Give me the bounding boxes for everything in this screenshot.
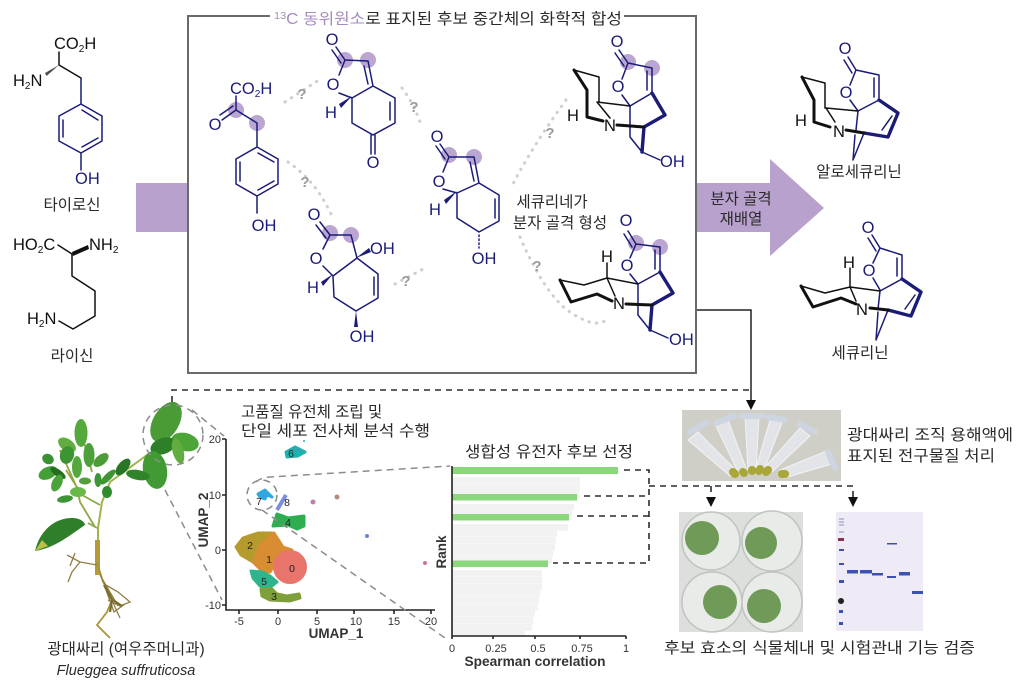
chart: Spearman correlation rank bars: Spearman correlation xyxy=(464,654,606,669)
heading: genome assembly and scRNA-seq: 고품질 유전체 조립 및 xyxy=(241,403,382,421)
structure: hydroxy butenolide: O xyxy=(433,173,446,191)
structure: securinane type intermediate: O xyxy=(620,212,633,230)
cluster numbers: 3 xyxy=(271,591,277,603)
label: plant name xyxy=(47,640,205,679)
structure: neosecurinane type intermediate: N xyxy=(604,117,616,135)
reaction paths: dotted uncertain steps: ? xyxy=(532,258,542,275)
chart: Spearman correlation rank bars: 0.5 xyxy=(530,643,546,655)
chart: UMAP scatter: 10 xyxy=(350,616,362,628)
connector: purple input bar xyxy=(136,183,188,232)
photo: leaf discs in culture wells xyxy=(679,511,803,632)
structure: keto acid intermediate: H xyxy=(260,80,272,98)
cluster numbers: 1 xyxy=(266,554,272,566)
cluster 7 xyxy=(258,490,272,499)
outlier clusters xyxy=(303,440,427,565)
cluster 0 xyxy=(273,550,307,584)
structure: lysine: H xyxy=(27,310,39,328)
image: plant Flueggea suffruticosa xyxy=(35,396,201,638)
cluster numbers: 5 xyxy=(261,576,267,588)
structure: allosecurinine: O xyxy=(840,84,853,102)
chart: Spearman correlation rank bars: 0.25 xyxy=(485,643,507,655)
structure: dihydroxy lactone xyxy=(307,206,395,346)
chart: UMAP scatter: 10 xyxy=(209,490,221,502)
cluster numbers xyxy=(247,448,295,603)
structure: tyrosine: CO xyxy=(54,35,79,53)
label: securinine: 세큐리닌 xyxy=(831,344,889,362)
structure: securinane type intermediate: O xyxy=(621,257,634,275)
structure: securinane type intermediate xyxy=(560,212,694,349)
reaction paths: dotted uncertain steps: ? xyxy=(297,86,307,103)
structure: neosecurinane type intermediate: O xyxy=(611,33,624,51)
structure: lysine: 2 xyxy=(113,245,119,256)
structure: butenolide dienone: O xyxy=(326,31,339,49)
label: tyrosine: 타이로신 xyxy=(43,196,101,214)
structure: butenolide dienone xyxy=(325,31,395,172)
chart: UMAP scatter: -5 xyxy=(234,616,244,628)
cluster 5 xyxy=(251,571,277,586)
cluster 6 xyxy=(286,447,305,457)
structure: lysine: 2 xyxy=(39,319,45,330)
cluster numbers: 8 xyxy=(284,497,290,509)
chart: Spearman correlation rank bars xyxy=(434,466,629,669)
chart: UMAP scatter: 20 xyxy=(425,616,437,628)
cluster 3 xyxy=(261,589,300,601)
structure: securinine: O xyxy=(862,219,875,237)
heading: genome assembly and scRNA-seq: 단일 세포 전사체 분석 수행 xyxy=(241,422,430,440)
structure: hydroxy butenolide: OH xyxy=(472,250,496,268)
structure: tyrosine: H xyxy=(84,35,96,53)
structure: allosecurinine: N xyxy=(833,123,845,141)
structure: neosecurinane type intermediate: O xyxy=(612,78,625,96)
cluster numbers: 2 xyxy=(247,540,253,552)
structure: allosecurinine: H xyxy=(795,112,807,130)
structure: lysine: NH xyxy=(89,236,113,254)
cluster numbers: 6 xyxy=(288,448,294,460)
structure: neosecurinane type intermediate xyxy=(567,33,685,171)
panel title: C 동위원소 xyxy=(286,10,365,28)
structure: keto acid intermediate xyxy=(209,80,278,235)
structure: allosecurinine: O xyxy=(839,40,852,58)
structure: lysine: HO xyxy=(13,236,38,254)
chart: Spearman correlation rank bars: 0 xyxy=(449,643,455,655)
arrow: skeletal rearrangement xyxy=(697,159,824,256)
chart: Spearman correlation rank bars: Rank xyxy=(434,535,449,569)
chart: UMAP scatter: 0 xyxy=(275,616,281,628)
dashed connector: plant to feeding xyxy=(172,390,751,402)
structure: hydroxy butenolide: O xyxy=(431,128,444,146)
arrow: skeletal rearrangement: 분자 골격 xyxy=(710,190,772,208)
dashed connectors: candidates to validation xyxy=(553,470,858,563)
label: securinega skeleton formation: 세큐리네가 xyxy=(516,193,588,211)
structure: securinane type intermediate: OH xyxy=(669,331,694,349)
heading: genome assembly and scRNA-seq xyxy=(241,403,430,440)
structure: lysine xyxy=(13,236,119,330)
structure: tyrosine: OH xyxy=(75,170,100,188)
label: securinega skeleton formation: 분자 골격 형성 xyxy=(513,214,607,232)
heading: candidate gene selection: 생합성 유전자 후보 선정 xyxy=(465,443,633,461)
structure: neosecurinane type intermediate: H xyxy=(567,107,579,125)
structure: lysine: N xyxy=(44,310,56,328)
label: feeding treatment: 광대싸리 조직 용해액에 xyxy=(847,426,1013,444)
label: lysine: 라이신 xyxy=(51,347,93,365)
cluster numbers: 7 xyxy=(256,496,262,508)
structure: tyrosine: H xyxy=(13,72,25,90)
panel: chemical synthesis box xyxy=(188,6,696,373)
structure: tyrosine xyxy=(13,35,102,188)
structure: butenolide dienone: O xyxy=(327,76,340,94)
structure: tyrosine: N xyxy=(30,72,42,90)
structure: lysine: C xyxy=(43,236,55,254)
label: plant name: Flueggea suffruticosa xyxy=(57,663,195,679)
structure: dihydroxy lactone: H xyxy=(307,279,319,297)
structure: butenolide dienone: O xyxy=(367,154,380,172)
structure: neosecurinane type intermediate: OH xyxy=(660,153,685,171)
structure: keto acid intermediate: O xyxy=(209,116,222,134)
label: plant name: 광대싸리 (여우주머니과) xyxy=(47,640,205,658)
label: feeding treatment: 표지된 전구물질 처리 xyxy=(847,447,995,465)
cluster 1 xyxy=(254,533,292,572)
structure: butenolide dienone: H xyxy=(325,104,337,122)
structure: hydroxy butenolide: H xyxy=(429,201,441,219)
reaction paths: dotted uncertain steps: ? xyxy=(401,273,411,290)
arrow: precursor flow to feeding xyxy=(697,310,756,410)
structure: tyrosine: 2 xyxy=(25,81,31,92)
structure: allosecurinine xyxy=(795,40,898,160)
panel title: 13 xyxy=(274,11,287,22)
chart: UMAP scatter: 5 xyxy=(314,616,320,628)
chart: UMAP scatter: UMAP_2 xyxy=(196,493,211,547)
chart: UMAP scatter: UMAP_1 xyxy=(309,626,364,641)
panel title: 로 표지된 후보 중간체의 화학적 합성 xyxy=(365,10,622,28)
zoom guides: leaf to UMAP xyxy=(143,405,224,600)
cluster 8 xyxy=(277,495,286,510)
reaction paths: dotted uncertain steps: ? xyxy=(300,174,310,191)
chart: Spearman correlation rank bars: 0.75 xyxy=(571,643,593,655)
chart: UMAP scatter: 15 xyxy=(388,616,400,628)
reaction paths: dotted uncertain steps: ? xyxy=(409,99,419,116)
reaction paths: dotted uncertain steps xyxy=(285,78,606,323)
structure: securinane type intermediate: N xyxy=(613,295,625,313)
arrow: skeletal rearrangement: 재배열 xyxy=(720,210,762,228)
structure: dihydroxy lactone: OH xyxy=(370,240,395,258)
chart: UMAP scatter: -10 xyxy=(205,600,221,612)
structure: keto acid intermediate: OH xyxy=(252,217,276,235)
cluster 4 xyxy=(273,514,304,529)
structure: dihydroxy lactone: OH xyxy=(350,328,374,346)
structure: tyrosine: 2 xyxy=(79,44,85,55)
chart: UMAP scatter: 20 xyxy=(209,434,221,446)
label: feeding treatment xyxy=(847,426,1013,465)
structure: securinine: H xyxy=(843,254,855,272)
photo: precursor tubes xyxy=(682,410,841,481)
cluster numbers: 0 xyxy=(289,563,295,575)
chart: Spearman correlation rank bars: 1 xyxy=(623,643,629,655)
structure: securinine: N xyxy=(856,301,868,319)
structure: securinine: O xyxy=(863,262,876,280)
chart: UMAP scatter: 0 xyxy=(215,545,221,557)
structure: lysine: 2 xyxy=(38,245,44,256)
zoom guides: cluster 7 to rank chart xyxy=(247,466,450,638)
structure: dihydroxy lactone: O xyxy=(310,250,323,268)
cluster 2 xyxy=(236,533,276,562)
reaction paths: dotted uncertain steps: ? xyxy=(545,125,555,142)
photo: protein gel xyxy=(836,512,923,631)
structure: securinine xyxy=(801,219,921,340)
label: securinega skeleton formation xyxy=(506,190,612,234)
label: allosecurinine: 알로세큐리닌 xyxy=(816,163,902,181)
chart: UMAP scatter xyxy=(196,434,437,641)
structure: hydroxy butenolide xyxy=(429,128,499,268)
structure: keto acid intermediate: CO xyxy=(230,80,255,98)
structure: securinane type intermediate: H xyxy=(601,248,613,266)
cluster numbers: 4 xyxy=(285,517,291,529)
label: in vivo and in vitro validation: 후보 효소의 식물체내 및 시험관내 기능 검증 xyxy=(664,639,975,657)
structure: keto acid intermediate: 2 xyxy=(255,89,261,100)
structure: dihydroxy lactone: O xyxy=(308,206,321,224)
